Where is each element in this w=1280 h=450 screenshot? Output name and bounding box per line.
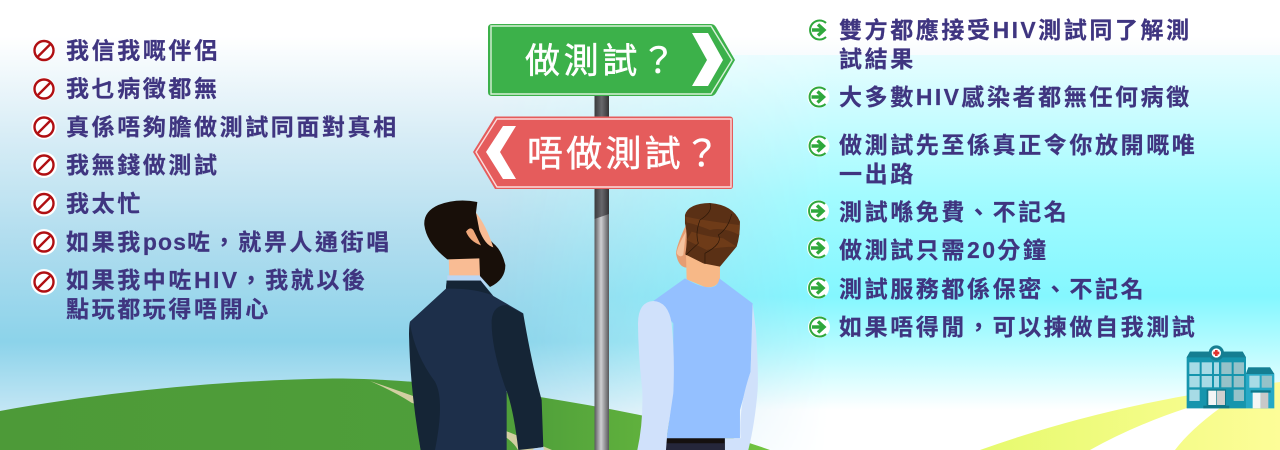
item 2: 我乜病徵都無 <box>66 76 220 102</box>
item 4: 測試喺免費、不記名 <box>839 199 1069 225</box>
item 5 <box>31 190 143 216</box>
green hill <box>0 378 770 450</box>
item 6: 測試服務都係保密、不記名 <box>839 276 1146 302</box>
item 3: 一出路 <box>839 161 916 187</box>
item 5: 我太忙 <box>66 190 143 216</box>
chevron left <box>486 126 516 179</box>
item 6: 如果我pos咗，就畀人通街唱 <box>66 229 392 255</box>
item 1: 我信我嘅伴侶 <box>66 38 220 64</box>
icon: hospital <box>1187 345 1274 408</box>
item 3: 做測試先至係真正令你放開嘅唯 <box>839 132 1197 158</box>
item 2: 大多數HIV感染者都無任何病徵 <box>839 84 1192 110</box>
item 1 <box>808 17 1192 72</box>
white road <box>1090 408 1220 450</box>
list: reasons to test <box>807 17 1197 340</box>
sign text: 做測試？ <box>525 42 679 81</box>
man with beard <box>409 201 544 450</box>
item 3: 真係唔夠膽做測試同面對真相 <box>66 114 399 140</box>
signpost pole <box>594 90 609 450</box>
item 1: 雙方都應接受HIV測試同了解測 <box>839 17 1192 43</box>
item 1: 試結果 <box>839 46 916 72</box>
item 7: 如果我中咗HIV，我就以後 <box>66 267 368 293</box>
path on hill <box>370 381 552 450</box>
item 3 <box>808 132 1197 187</box>
man in blue vest <box>637 203 758 450</box>
sign: do not test <box>473 116 733 189</box>
yellow hill <box>980 382 1280 450</box>
item 4: 我無錢做測試 <box>66 152 220 178</box>
item 7: 點玩都玩得唔開心 <box>66 296 271 322</box>
sign: do the test <box>488 24 735 96</box>
list: reasons not to test <box>31 38 399 322</box>
chevron right <box>692 33 723 86</box>
item 5: 做測試只需20分鐘 <box>839 237 1049 263</box>
sign text: 唔做測試？ <box>527 133 723 174</box>
item 7 <box>31 267 368 322</box>
item 7: 如果唔得閒，可以揀做自我測試 <box>839 314 1197 340</box>
